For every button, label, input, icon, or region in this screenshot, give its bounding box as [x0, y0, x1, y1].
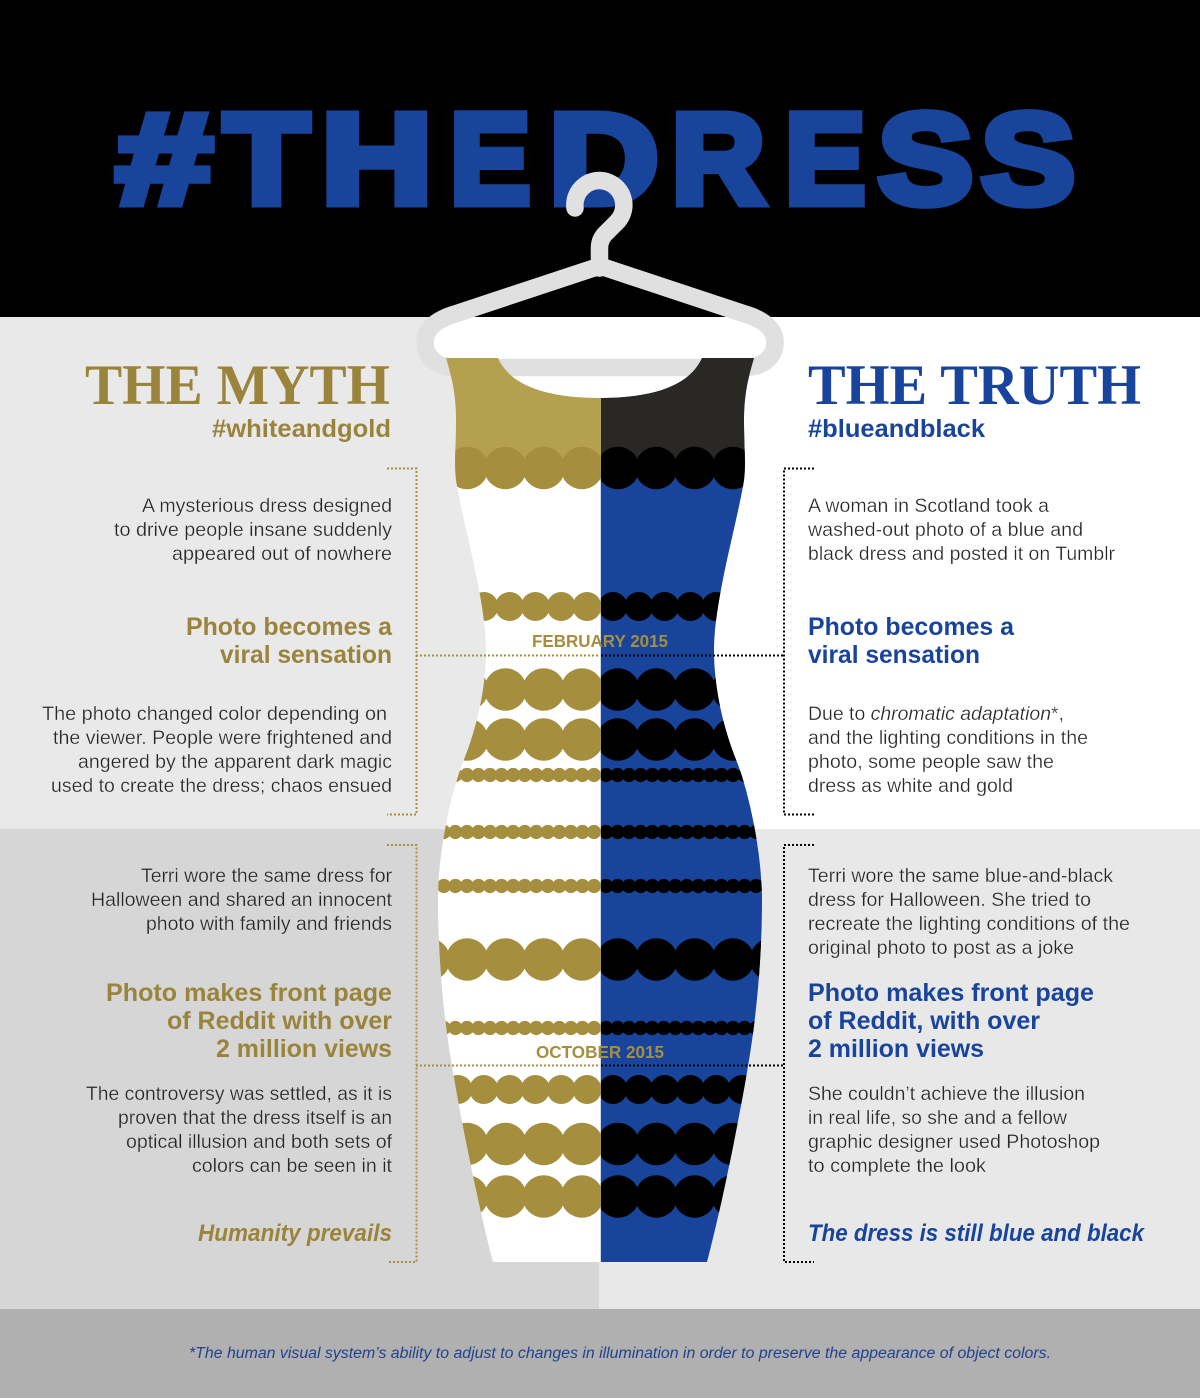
text block: myth Halloween: Halloween and shared an innocent — [91, 890, 393, 911]
text block: myth color change: angered by the apparent dark magic — [78, 752, 392, 773]
text block: myth color change: used to create the dress; chaos ensued — [51, 776, 392, 797]
subheading: #whiteandgold: #whiteandgold — [212, 415, 391, 443]
callout: truth Reddit: Photo makes front page — [808, 979, 1094, 1007]
timeline connector: February black — [601, 654, 784, 656]
title: #THEDRESS: E — [450, 88, 530, 231]
timeline connector: February gold — [416, 654, 600, 656]
title: #THEDRESS: T — [224, 88, 309, 231]
panel: footnote background — [0, 1309, 1200, 1398]
text block: truth chromatic adaptation — [808, 704, 1088, 797]
heading: The Myth: THE MYTH — [85, 354, 390, 417]
heading: The Truth: THE TRUTH — [808, 354, 1141, 417]
text block: truth Halloween: dress for Halloween. She tried to — [808, 890, 1091, 911]
bracket: truth lower — [784, 845, 814, 1262]
text block: myth controversy settled: optical illusion and both sets of — [126, 1132, 393, 1153]
text block: myth intro — [114, 496, 393, 565]
callout: myth viral sensation: Photo becomes a — [186, 613, 393, 641]
footnote: *The human visual system’s ability to adjust to changes in illumination in order to preserve the appearance of object colors. — [189, 1345, 1051, 1362]
icon: coat hanger — [425, 181, 775, 368]
text block: truth intro: A woman in Scotland took a — [808, 496, 1049, 517]
callout: truth Reddit — [808, 979, 1094, 1063]
title: #THEDRESS: # — [117, 88, 212, 230]
dress right half: blue and black — [600, 358, 762, 1262]
text block: truth chromatic adaptation: dress as white and gold — [808, 776, 1013, 797]
title: #THEDRESS: S — [981, 88, 1075, 231]
text block: truth chromatic adaptation: photo, some people saw the — [808, 752, 1054, 773]
callout: myth Reddit: 2 million views — [216, 1035, 392, 1063]
bracket: truth upper — [784, 468, 814, 814]
text block: myth color change — [42, 704, 392, 797]
panel: myth lower background — [0, 829, 599, 1309]
text block: myth color change: The photo changed color depending on — [42, 704, 387, 725]
text block: truth Halloween: original photo to post as a joke — [808, 938, 1074, 959]
timeline connector: October black — [601, 1064, 784, 1066]
text block: truth Photoshop: graphic designer used Photoshop — [808, 1132, 1100, 1153]
callout: truth Reddit: of Reddit, with over — [808, 1007, 1040, 1035]
title: #THEDRESS: D — [549, 87, 658, 230]
text block: myth controversy settled: colors can be seen in it — [192, 1156, 393, 1177]
text block: myth Halloween — [91, 866, 393, 935]
top black header background — [0, 0, 1200, 317]
text block: truth intro — [807, 496, 1116, 565]
callout: truth Reddit: 2 million views — [808, 1035, 984, 1063]
callout: myth viral sensation: viral sensation — [220, 641, 392, 669]
callout: myth Reddit: Photo makes front page — [106, 979, 392, 1007]
text block: truth Photoshop: She couldn’t achieve the illusion — [808, 1084, 1085, 1105]
title: #THEDRESS — [117, 87, 1075, 231]
text block: myth color change: the viewer. People were frightened and — [53, 728, 392, 749]
panel: truth upper background — [600, 317, 1200, 829]
conclusion: humanity prevails: Humanity prevails — [198, 1220, 392, 1247]
text block: truth Photoshop: to complete the look — [808, 1156, 987, 1177]
text block: myth intro: appeared out of nowhere — [172, 544, 392, 565]
subheading: #blueandblack: #blueandblack — [808, 415, 985, 443]
dress left half: white and gold — [438, 358, 601, 1262]
callout: myth viral sensation — [186, 613, 393, 669]
panel: truth lower background — [599, 829, 1200, 1309]
text block: truth Photoshop — [808, 1084, 1100, 1177]
text block: truth chromatic adaptation: and the lighting conditions in the — [808, 728, 1088, 749]
bracket: myth lower — [387, 845, 416, 1262]
date label: February 2015: FEBRUARY 2015 — [532, 631, 668, 651]
conclusion: still blue and black: The dress is still blue and black — [808, 1220, 1146, 1247]
text block: myth controversy settled: proven that the dress itself is an — [118, 1108, 392, 1129]
callout: myth Reddit — [106, 979, 392, 1063]
text block: myth intro: to drive people insane suddenly — [114, 520, 393, 541]
text block: truth Halloween: recreate the lighting conditions of the — [808, 914, 1130, 935]
text block: myth Halloween: photo with family and friends — [146, 914, 392, 935]
panel: myth upper background — [0, 317, 600, 829]
text block: myth controversy settled: The controversy was settled, as it is — [86, 1084, 392, 1105]
title: #THEDRESS: R — [672, 88, 765, 231]
text block: truth chromatic adaptation: Due to chromatic adaptation*, — [808, 704, 1064, 725]
title: #THEDRESS: S — [878, 87, 973, 230]
text block: myth intro: A mysterious dress designed — [142, 496, 392, 517]
callout: truth viral sensation: Photo becomes a — [808, 613, 1015, 641]
text block: truth intro: black dress and posted it on Tumblr — [808, 544, 1116, 565]
text block: truth Halloween: Terri wore the same blue-and-black — [808, 866, 1114, 887]
text block: truth intro: washed-out photo of a blue and — [807, 520, 1083, 541]
dress illustration — [438, 358, 762, 1262]
text block: truth Photoshop: in real life, so she and a fellow — [808, 1108, 1067, 1129]
timeline connector: October gold — [416, 1064, 600, 1066]
text block: myth Halloween: Terri wore the same dress for — [141, 866, 393, 887]
white interior behind the hanger and neckline — [430, 317, 770, 400]
text block: myth controversy settled — [86, 1084, 393, 1177]
callout: myth Reddit: of Reddit with over — [167, 1007, 392, 1035]
bracket: myth upper — [387, 468, 416, 814]
callout: truth viral sensation — [808, 613, 1015, 669]
text block: truth Halloween — [808, 866, 1130, 959]
title: #THEDRESS: H — [322, 87, 432, 230]
title: #THEDRESS: E — [785, 88, 865, 231]
callout: truth viral sensation: viral sensation — [808, 641, 980, 669]
date label: October 2015: OCTOBER 2015 — [536, 1042, 664, 1062]
